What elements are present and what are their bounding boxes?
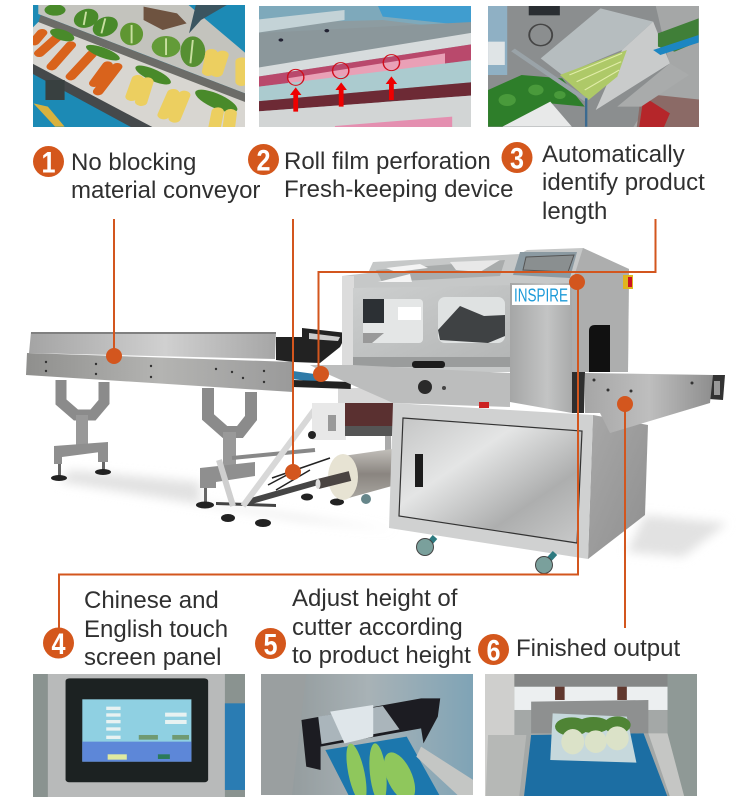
callout line 1 — [106, 219, 122, 364]
heading 5: adjust cutter height — [255, 585, 471, 669]
heading 1: no blocking conveyor — [33, 146, 260, 204]
callout line 4 — [59, 274, 585, 630]
heading 6: finished output: 6 — [486, 634, 500, 668]
cabinet body — [389, 403, 648, 574]
photo: product length detection — [488, 6, 699, 127]
machine head — [310, 248, 713, 433]
photo: cutter over belt — [261, 674, 473, 795]
heading 4: touch screen panel: 4 — [52, 628, 66, 661]
photo: finished bagged vegetables — [483, 670, 703, 800]
heading 3: identify product length: identify product — [542, 169, 705, 196]
conveyor support legs — [51, 380, 344, 527]
heading 3: identify product length: length — [542, 198, 607, 225]
floor shadows — [60, 470, 727, 557]
heading 6: finished output: Finished output — [516, 635, 680, 662]
heading 3: identify product length — [502, 141, 705, 225]
heading 5: adjust cutter height: Adjust height of — [292, 585, 458, 612]
heading 4: touch screen panel: Chinese and — [84, 587, 219, 614]
machine illustration — [26, 248, 727, 574]
photo: roll film perforation — [259, 6, 471, 127]
heading 2: roll film perforation: 2 — [256, 144, 270, 178]
heading 5: adjust cutter height: 5 — [264, 628, 278, 662]
heading 5: adjust cutter height: to product height — [292, 642, 471, 669]
heading 5: adjust cutter height: cutter according — [292, 614, 463, 641]
heading 2: roll film perforation — [248, 144, 513, 203]
callout line 3 — [313, 219, 656, 382]
heading 4: touch screen panel: English touch — [84, 616, 228, 643]
heading 3: identify product length: 3 — [510, 142, 524, 176]
heading 2: roll film perforation: Roll film perforation — [284, 148, 491, 175]
infeed conveyor — [26, 328, 351, 392]
heading 1: no blocking conveyor: 1 — [42, 146, 56, 180]
logo: INSPIRE: INSPIRE — [514, 286, 568, 306]
callout line 2 — [285, 219, 301, 480]
photo: touch screen panel — [29, 670, 249, 800]
output conveyor end — [709, 375, 725, 400]
heading 2: roll film perforation: Fresh-keeping device — [284, 176, 513, 203]
film roll unit — [216, 388, 393, 507]
heading 1: no blocking conveyor: No blocking — [71, 149, 196, 176]
callout line 6 — [617, 396, 633, 628]
photo: vegetables on conveyor — [33, 5, 245, 127]
heading 1: no blocking conveyor: material conveyor — [71, 177, 260, 204]
heading 4: touch screen panel — [43, 587, 228, 671]
heading 4: touch screen panel: screen panel — [84, 644, 221, 671]
heading 6: finished output — [478, 634, 680, 668]
heading 3: identify product length: Automatically — [542, 141, 685, 168]
